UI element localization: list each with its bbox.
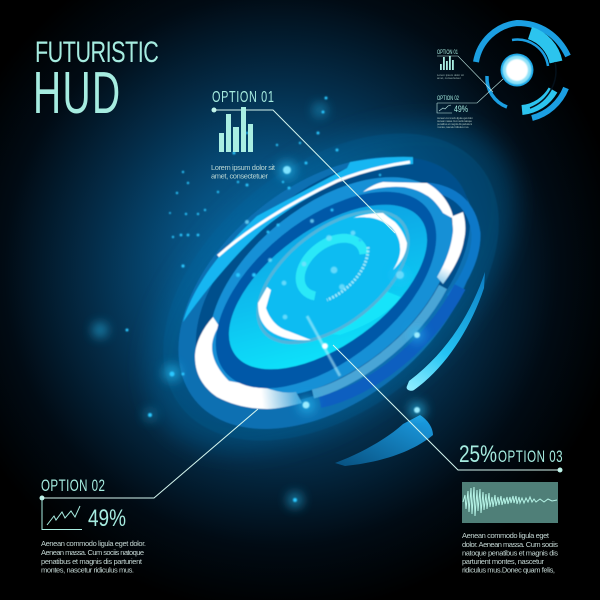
option 01 bar chart [219,107,253,152]
mini option 02: OPTION 02 [437,96,459,102]
outer blue crescent [127,102,527,484]
option 02 leader line [40,409,258,500]
middle blue ring [169,134,493,440]
option 03 heading: OPTION 03 [498,448,563,467]
mini option 02 [437,79,503,129]
white top-right arc [363,182,465,284]
option 02 percentage: 49% [88,505,126,532]
option 02 heading: OPTION 02 [41,477,105,496]
option 01 heading: OPTION 01 [212,88,274,106]
dark blue ring [181,154,471,426]
title: FUTURISTIC [35,34,159,69]
option 02 text [41,539,146,574]
option 02 line chart [42,498,82,530]
option 03 text: dolor. Aenean massa. Cum sociis [462,540,558,549]
tick mark arc [327,247,368,300]
mini option 01: amet, consectetuer [437,76,461,80]
title: HUD [33,60,120,126]
option 03 text: ridiculus mus.Donec quam felis, [462,566,555,574]
white streak [218,162,410,256]
navy gap ring [151,109,515,453]
centre cyan arc [300,238,364,296]
mini HUD rings [476,23,568,118]
lower-right cyan arc [407,272,485,391]
bottom blue blob [335,415,433,466]
cyan upper band [183,157,413,322]
mini option 02: penatibus et magnis dis parturient [437,122,472,126]
option 01 leader line [212,108,395,233]
pale lower-right band [313,287,443,394]
option 02 text: Aenean commodo ligula eget dolor. [41,539,146,548]
waveform panel [462,482,558,523]
option 02 text: penatibus et magnis dis parturient [41,557,143,566]
option 03 leader line [333,345,562,472]
option 03 [333,345,563,574]
mini HUD core [500,54,534,86]
mini option 02: Aenean massa. Cum sociis natoque [437,119,472,123]
deep blue lower-right band [320,287,460,402]
white inner crescent [258,287,311,340]
main HUD rings [87,57,575,517]
faint outer halo disc [87,57,575,517]
option 03 text: natoque penatibus et magnis dis [462,548,558,558]
inner ring disc [235,186,431,368]
option 03 text: Aenean commodo ligula eget [462,531,550,540]
title [33,34,159,126]
option 03 percentage: 25% [459,441,497,468]
option 03 text [462,531,558,574]
mini option 01 [437,50,493,92]
cyan inner disc [201,172,455,402]
mini HUD top right [437,23,568,129]
option 01 text [211,163,276,180]
option 02 [40,409,258,574]
option 02 text: montes, nascetur ridiculus mus. [41,566,134,574]
mini option 02: Aenean commodo ligula eget dolor. [437,116,473,120]
faint outer band [105,71,557,503]
lens flare [307,316,340,376]
mini option 02: montes, nascetur ridiculus mus. [437,125,469,129]
bright lower wedge [318,290,401,335]
option 01 text: Lorem ipsum dolor sit [211,163,276,172]
white lower-left crescent [195,317,302,409]
mini option 02: 49% [454,104,468,114]
option 01 [211,88,395,233]
particles [94,96,424,506]
mini option 01: OPTION 01 [437,50,458,56]
mini option 01: Lorem ipsum dolor sit [437,73,464,77]
option 01 text: amet, consectetuer [211,172,268,180]
option 02 text: Aenean massa. Cum sociis natoque [41,548,144,557]
option 03 text: parturient montes, nascetur [462,557,544,566]
white inner top arc [353,213,407,270]
outer right band [427,187,476,298]
